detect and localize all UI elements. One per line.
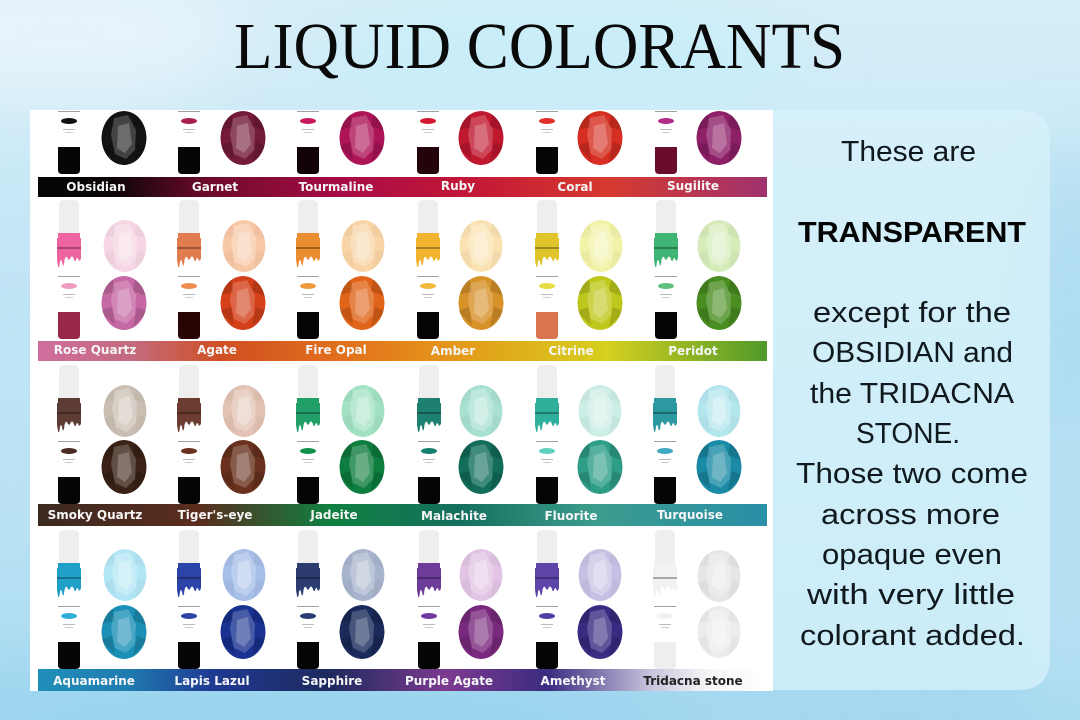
color band: row 1: Coral [557,180,593,194]
color band: row 4: Sapphire [302,674,362,688]
color band: row 3: Malachite [421,509,487,523]
color band: row 1: Obsidian [66,180,126,194]
color band: row 2: Peridot [668,344,718,358]
note paragraph: colorant added. [800,620,1025,652]
color band: row 1: Sugilite [667,179,719,193]
panel: transparency note [730,110,1050,690]
swatch: Purple Agate [417,530,505,669]
note emphasis: TRANSPARENT: TRANSPARENT [798,217,1026,249]
note paragraph: OBSIDIAN and [812,337,1013,369]
swatch: Tourmaline [297,111,384,174]
swatch: Lapis Lazul [177,530,268,669]
color band: row 3: Turquoise [657,508,723,522]
color band: row 3 [38,504,767,526]
swatch: Aquamarine [57,530,149,669]
swatch: Rose Quartz [57,200,149,339]
swatch: Amethyst [535,530,624,669]
swatch: Ruby [417,111,504,174]
swatch: Citrine [535,200,625,339]
color band: row 2: Fire Opal [305,343,367,357]
color band: row 4: Aquamarine [53,674,135,688]
color band: row 1: Garnet [192,180,238,194]
note paragraph: across more [821,499,1000,531]
color band: row 3: Tiger's-eye [178,508,252,522]
swatch: Coral [536,111,622,174]
note paragraph: opaque even [822,539,1002,571]
swatch: Amber [416,200,505,339]
color band: row 4: Tridacna stone [643,674,743,688]
swatch: Malachite [417,365,505,504]
swatch: Sapphire [296,530,387,669]
color band: row 3: Smoky Quartz [48,508,142,522]
note paragraph: Those two come [796,458,1028,490]
swatch: Jadeite [296,365,387,504]
color band: row 1: Tourmaline [299,180,373,194]
note paragraph: STONE. [856,418,960,450]
color band: row 4 [38,669,767,691]
title: LIQUID COLORANTS [234,10,845,83]
color band: row 3: Fluorite [544,509,598,523]
swatch: Garnet [178,111,266,174]
swatch: Obsidian [58,111,146,174]
note paragraph [796,297,1028,652]
swatch: Turquoise [653,365,743,504]
note paragraph: with very little [806,579,1015,611]
panel: colorant chart [30,110,773,691]
color band: row 4: Amethyst [541,674,606,688]
note line: These are: These are [841,136,976,168]
note paragraph: the TRIDACNA [810,378,1015,410]
color band: row 3: Jadeite [309,508,358,522]
color band: row 4: Purple Agate [405,674,493,688]
swatch: Peridot [654,200,743,339]
swatch: Tiger's-eye [177,365,268,504]
color band: row 2 [38,341,767,361]
color band: row 2: Amber [431,344,475,358]
color band: row 1: Ruby [441,179,475,193]
swatch: Sugilite [655,111,742,174]
swatch: Tridacna stone [653,530,743,669]
note paragraph: except for the [813,297,1011,329]
swatch: Fluorite [535,365,624,504]
color band: row 2: Agate [197,343,237,357]
color band: row 2: Citrine [548,344,594,358]
swatch: Smoky Quartz [57,365,149,504]
swatch: Fire Opal [296,200,387,339]
color band: row 4: Lapis Lazul [174,674,250,688]
swatch: Agate [177,200,268,339]
color band: row 1 [38,177,767,197]
color band: row 2: Rose Quartz [54,343,136,357]
row 1 swatches [58,111,742,174]
